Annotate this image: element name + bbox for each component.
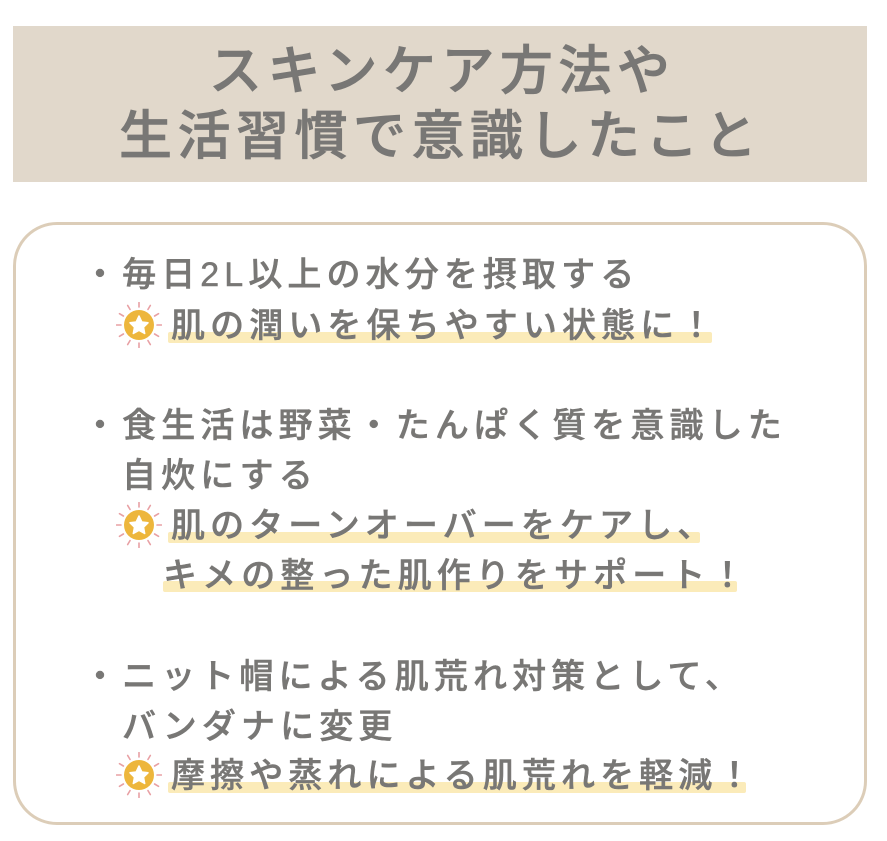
item 2 heading line 1: ・食生活は野菜・たんぱく質を意識した <box>83 407 787 445</box>
item 3 heading line 2: バンダナに変更 <box>122 708 397 746</box>
item 3 benefit: 摩擦や蒸れによる肌荒れを軽減！ <box>171 757 756 795</box>
item 2 benefit line 1: 肌のターンオーバーをケアし、 <box>171 507 716 545</box>
item 2 highlight line 2 <box>163 581 737 592</box>
item 3 heading line 1: ・ニット帽による肌荒れ対策として、 <box>83 658 744 696</box>
item 3 highlight <box>168 782 746 793</box>
item 1 sun star icon <box>116 302 162 348</box>
item 2 sun star icon <box>116 502 162 548</box>
title banner <box>13 26 867 182</box>
item 2 heading line 2: 自炊にする <box>122 457 318 495</box>
item 1 highlight <box>168 332 712 343</box>
title line 2: 生活習慣で意識したこと <box>119 107 762 166</box>
item 3 sun star icon <box>116 752 162 798</box>
item 2 benefit line 2: キメの整った肌作りをサポート！ <box>163 557 750 595</box>
panel: skincare and lifestyle list <box>13 222 867 825</box>
item 2 highlight line 1 <box>168 532 700 543</box>
item 1 heading: ・毎日2L以上の水分を摂取する <box>83 256 639 294</box>
item 1 benefit: 肌の潤いを保ちやすい状態に！ <box>171 307 718 345</box>
title line 1: スキンケア方法や <box>209 42 675 101</box>
